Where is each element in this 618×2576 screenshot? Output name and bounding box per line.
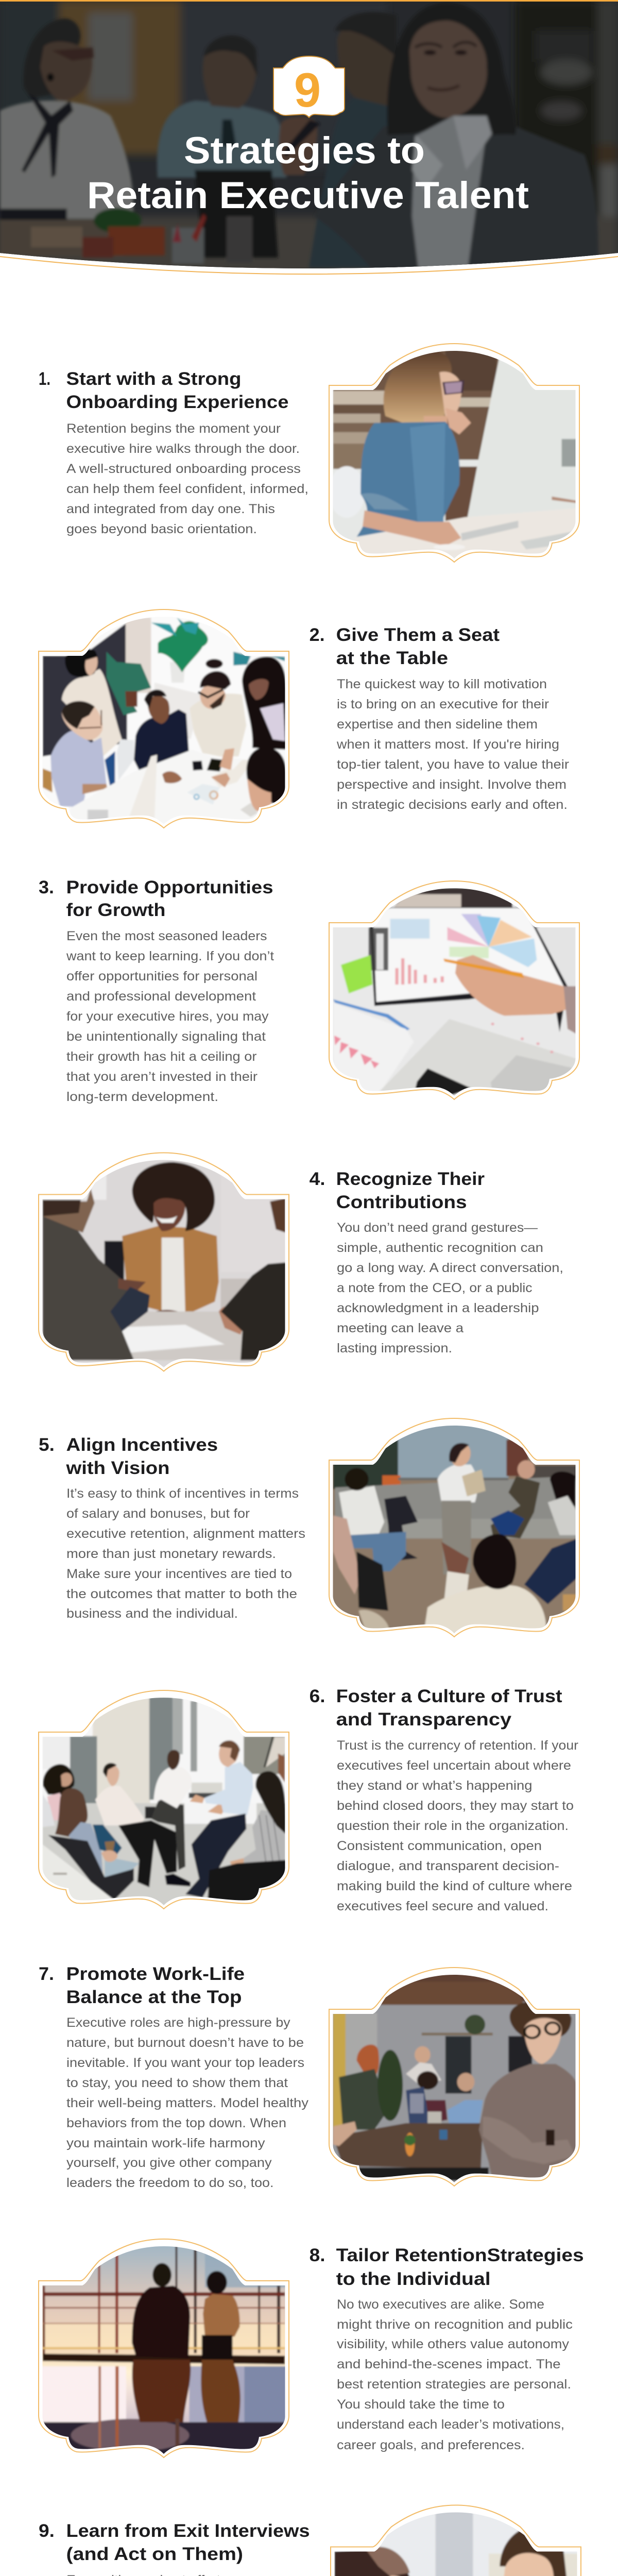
panel: strategy 2 [38,609,569,828]
text block: strategy 3: long-term development. [66,1090,218,1104]
text block: strategy 8: understand each leader’s motivations, [337,2417,564,2432]
man behind right woman [309,98,402,268]
text block: strategy 8: visibility, while others value autonomy [337,2337,570,2351]
text block: strategy 2: expertise and then sideline them [337,717,538,732]
heading: strategy 6 [310,1686,562,1730]
text block: strategy 8: career goals, and preferences. [337,2438,525,2452]
text block: strategy 6: Trust is the currency of retention. If your [337,1738,578,1753]
heading: strategy 1: Onboarding Experience [66,392,288,412]
heading: strategy 6: Foster a Culture of Trust [336,1686,562,1706]
text block: strategy 1: goes beyond basic orientation. [66,522,257,536]
heading: strategy 4: Recognize Their [336,1169,485,1189]
heading: strategy 3: 3. [39,877,54,897]
heading: strategy 2 [310,625,500,668]
text block: strategy 7: you maintain work-life harmony [66,2136,265,2150]
text block: strategy 7 [66,2015,309,2190]
text block: strategy 3: that you aren’t invested in their [66,1070,258,1084]
photo: group applauding in a circle [327,1417,583,1637]
text block: strategy 7: their well-being matters. Model healthy [66,2096,309,2110]
text block: strategy 2: when it matters most. If you're hiring [336,737,559,752]
text block: strategy 2: in strategic decisions early and often. [337,798,568,812]
panel: strategy 6 [38,1686,578,1913]
text block: strategy 4: lasting impression. [337,1341,452,1355]
text block: strategy 2: top-tier talent, you have to value their [337,757,569,772]
text block: strategy 1: A well-structured onboarding process [66,462,301,476]
heading: strategy 6: 6. [310,1686,325,1706]
heading: strategy 3 [39,877,273,920]
heading: strategy 9: 9. [39,2521,55,2541]
heading: strategy 2: 2. [310,625,325,645]
text block: strategy 3: want to keep learning. If you don’t [66,949,274,963]
heading: strategy 9: Learn from Exit Interviews [66,2521,310,2541]
text block: strategy 8: best retention strategies are personal. [337,2377,571,2392]
text block: strategy 1: Retention begins the moment your [66,421,281,436]
photo: confident woman with team behind [327,1968,583,2186]
photo: couple silhouetted at window [36,2239,291,2459]
text block: strategy 5: the outcomes that matter to both the [66,1587,297,1601]
heading: strategy 8: to the Individual [336,2269,491,2289]
text block: strategy 6: dialogue, and transparent decision- [337,1859,559,1873]
badge with number 9: 9 [294,63,321,117]
text block: strategy 3 [66,929,274,1104]
heading: strategy 9: (and Act on Them) [66,2544,243,2564]
text block: strategy 5: executive retention, alignment matters [66,1527,305,1541]
text block: strategy 2: The quickest way to kill motivation [337,677,547,691]
text block: strategy 2: is to bring on an executive for their [337,697,549,711]
text block: strategy 3: Even the most seasoned leaders [66,929,267,943]
panel: strategy 7 [39,1964,583,2190]
heading: strategy 4: Contributions [336,1192,467,1212]
text block: strategy 7: to stay, you need to show them that [66,2076,288,2090]
text block: strategy 1: executive hire walks through the door. [66,442,300,456]
text block: strategy 8: You should take the time to [337,2397,505,2412]
text block: strategy 3: offer opportunities for personal [66,969,258,984]
text block: strategy 6: executives feel uncertain about where [337,1758,571,1773]
heading: strategy 1: 1. [39,369,50,389]
heading: strategy 6: and Transparency [336,1709,512,1730]
text block: strategy 7: Executive roles are high-pressure by [66,2015,290,2030]
text block: strategy 8 [337,2297,573,2452]
photo: handshake at a meeting [36,1150,291,1371]
text block: strategy 6 [337,1738,578,1913]
badge with number 9 [273,56,345,117]
text block: strategy 4 [337,1221,563,1355]
text block: strategy 2: perspective and insight. Involve them [337,777,566,792]
heading: strategy 7: Promote Work-Life [66,1964,245,1984]
text block: strategy 5: Make sure your incentives are tied to [66,1567,292,1581]
top accent bar [0,0,618,2]
header curve line [0,257,618,274]
text block: strategy 3: and professional development [66,989,256,1004]
text block: strategy 1 [66,421,308,536]
text block: strategy 6: they stand or what’s happening [337,1778,533,1793]
heading: strategy 8 [310,2245,584,2289]
title [87,130,529,216]
heading: strategy 7: 7. [39,1964,54,1984]
heading: strategy 3: for Growth [66,900,166,920]
text block: strategy 5: It’s easy to think of incentives in terms [66,1486,299,1501]
heading: strategy 4: 4. [310,1169,325,1189]
text block: strategy 3: their growth has hit a ceiling or [66,1049,256,1064]
heading: strategy 5 [39,1435,218,1478]
heading: strategy 1 [39,369,288,412]
text block: strategy 6: executives feel secure and valued. [337,1899,548,1913]
heading: strategy 2: Give Them a Seat [336,625,500,645]
photo: woman at computer [327,344,583,562]
text block: strategy 8: might thrive on recognition and public [337,2317,573,2332]
text block: strategy 4: You don’t need grand gestures— [337,1221,538,1235]
text block: strategy 6: Consistent communication, open [337,1839,542,1853]
centre man [157,100,287,178]
text block: strategy 6: behind closed doors, they may start to [337,1799,574,1813]
hand with pen [279,116,317,175]
text block: strategy 7: nature, but burnout doesn’t have to be [66,2036,304,2050]
text block: strategy 5 [66,1486,305,1621]
heading: strategy 8: Tailor RetentionStrategies [336,2245,584,2265]
text block: strategy 4: simple, authentic recognition can [337,1241,543,1255]
text block: strategy 7: leaders the freedom to do so, too. [66,2176,274,2190]
photo: two women talking [327,2502,583,2576]
header banner photo [0,0,618,281]
panel: strategy 9 [39,2502,583,2576]
heading: strategy 7 [39,1964,245,2007]
text block: strategy 4: go a long way. A direct conversation, [337,1261,563,1275]
heading: strategy 5: with Vision [65,1458,169,1478]
text block: strategy 3: for your executive hires, you may [66,1009,269,1024]
heading: strategy 5: Align Incentives [66,1435,218,1455]
heading: strategy 7: Balance at the Top [66,1987,242,2007]
text block: strategy 7: yourself, you give other company [66,2156,272,2170]
text block: strategy 7: inevitable. If you want your top leaders [66,2056,304,2070]
text block: strategy 8: and behind-the-scenes impact. The [337,2357,561,2371]
right woman [314,126,598,281]
text block: strategy 3: be unintentionally signaling that [66,1029,266,1044]
text block: strategy 6: question their role in the organization. [337,1819,569,1833]
text block: strategy 5: more than just monetary rewards. [66,1547,276,1561]
heading: strategy 9 [39,2521,310,2564]
text block: strategy 2 [336,677,569,812]
heading: strategy 5: 5. [39,1435,55,1455]
title: Strategies to [184,130,425,172]
text block: strategy 7: behaviors from the top down. When [66,2116,286,2130]
text block: strategy 5: of salary and bonuses, but for [66,1506,250,1521]
panel: strategy 8 [36,2239,584,2459]
panel: strategy 3 [39,877,583,1104]
heading: strategy 2: at the Table [336,648,448,668]
heading: strategy 4 [310,1169,485,1212]
text block: strategy 8: No two executives are alike. Some [337,2297,544,2312]
left woman [0,100,133,219]
heading: strategy 3: Provide Opportunities [66,877,273,897]
heading: strategy 8: 8. [310,2245,325,2265]
photo: team conversation in office [38,1690,290,1911]
photo: team around a table [38,609,290,828]
plant and pot [94,208,141,233]
photo: hand marking charts [327,881,583,1099]
text block: strategy 1: and integrated from day one. This [66,502,275,516]
panel: strategy 5 [39,1417,583,1637]
title: Retain Executive Talent [87,175,529,216]
panel: strategy 1 [39,344,583,562]
heading: strategy 1: Start with a Strong [66,369,241,389]
text block: strategy 4: a note from the CEO, or a public [337,1281,533,1295]
text block: strategy 1: can help them feel confident, informed, [66,482,308,496]
text block: strategy 4: meeting can leave a [337,1321,464,1335]
panel: strategy 4 [36,1150,563,1371]
text block: strategy 4: acknowledgment in a leadership [337,1301,539,1315]
text block: strategy 5: business and the individual. [66,1606,238,1621]
text block: strategy 6: making build the kind of culture where [337,1879,572,1893]
